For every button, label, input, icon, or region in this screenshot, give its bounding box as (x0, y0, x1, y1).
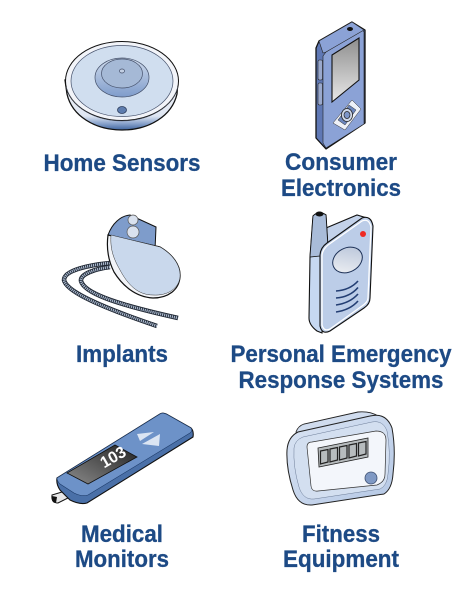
label: Medical Monitors (75, 521, 169, 573)
label: Fitness Equipment: Fitness (302, 521, 380, 548)
device: home sensor (65, 42, 178, 130)
device: fitness pedometer (287, 412, 394, 505)
label: Personal Emergency Response Systems: Personal Emergency (230, 341, 452, 368)
label: Fitness Equipment (283, 521, 399, 573)
device: implant (64, 215, 180, 326)
label: Medical Monitors: Monitors (75, 546, 169, 573)
label: Personal Emergency Response Systems: Response Systems (238, 367, 444, 394)
device: medical monitor (52, 413, 193, 504)
label: Consumer Electronics (281, 149, 401, 202)
label: Fitness Equipment: Equipment (283, 546, 399, 573)
reading: 103: 103 (98, 444, 129, 472)
label: Consumer Electronics: Consumer (285, 149, 397, 176)
label: Personal Emergency Response Systems (230, 341, 452, 394)
label: Consumer Electronics: Electronics (281, 175, 401, 202)
label: Home Sensors: Home Sensors (44, 150, 200, 177)
device: personal emergency phone (309, 212, 373, 333)
display digits (320, 442, 366, 464)
device: consumer electronics player (316, 22, 365, 149)
label: Medical Monitors: Medical (81, 521, 163, 548)
label: Implants: Implants (76, 341, 168, 368)
